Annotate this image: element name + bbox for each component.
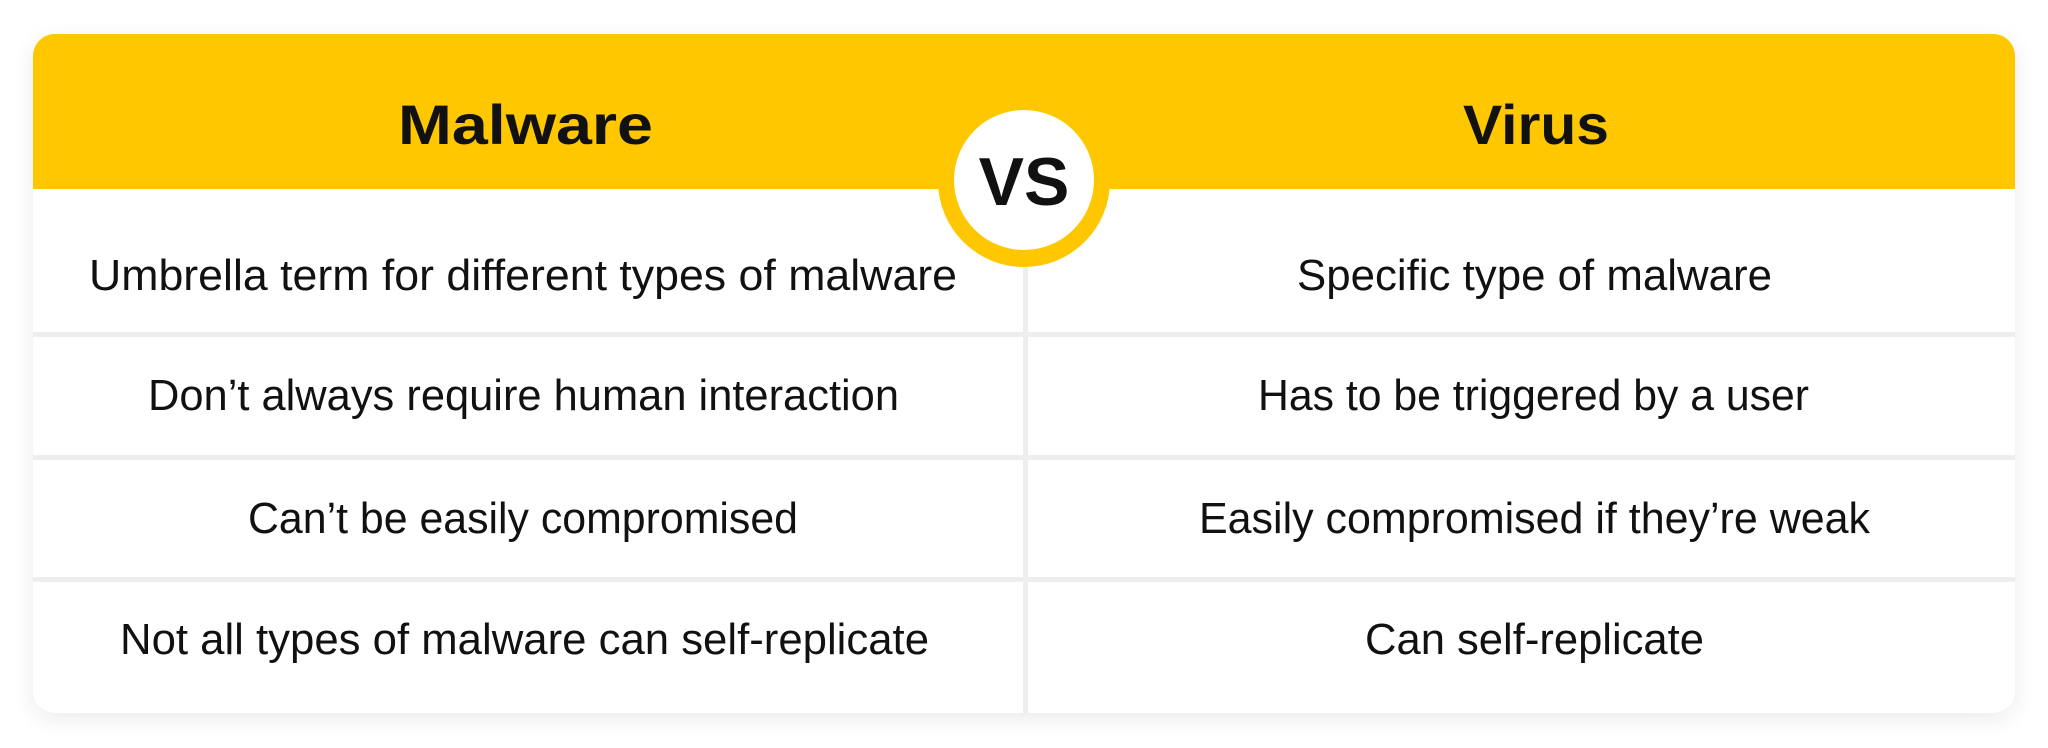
header bar — [33, 34, 2015, 189]
row 4 text: Can self-replicate — [1365, 615, 1704, 664]
row 2 text: Has to be triggered by a user — [1258, 371, 1809, 420]
row 4 text — [120, 615, 1704, 664]
row 2 text — [148, 371, 1809, 420]
row 3 text: Easily compromised if they’re weak — [1199, 494, 1871, 543]
VS badge — [938, 95, 1110, 267]
row 1 text: Umbrella term for different types of malware — [89, 251, 957, 300]
row 3 text: Can’t be easily compromised — [248, 494, 798, 543]
row 1 text: Specific type of malware — [1297, 251, 1772, 300]
row 4 text: Not all types of malware can self-replicate — [120, 615, 929, 664]
row 3 text — [248, 494, 1871, 543]
heading: Malware: Malware — [398, 93, 653, 156]
row 2 text: Don’t always require human interaction — [148, 371, 899, 420]
heading: Virus: Virus — [1463, 93, 1609, 156]
VS badge: VS — [979, 144, 1069, 220]
row 1 text — [89, 251, 1772, 300]
